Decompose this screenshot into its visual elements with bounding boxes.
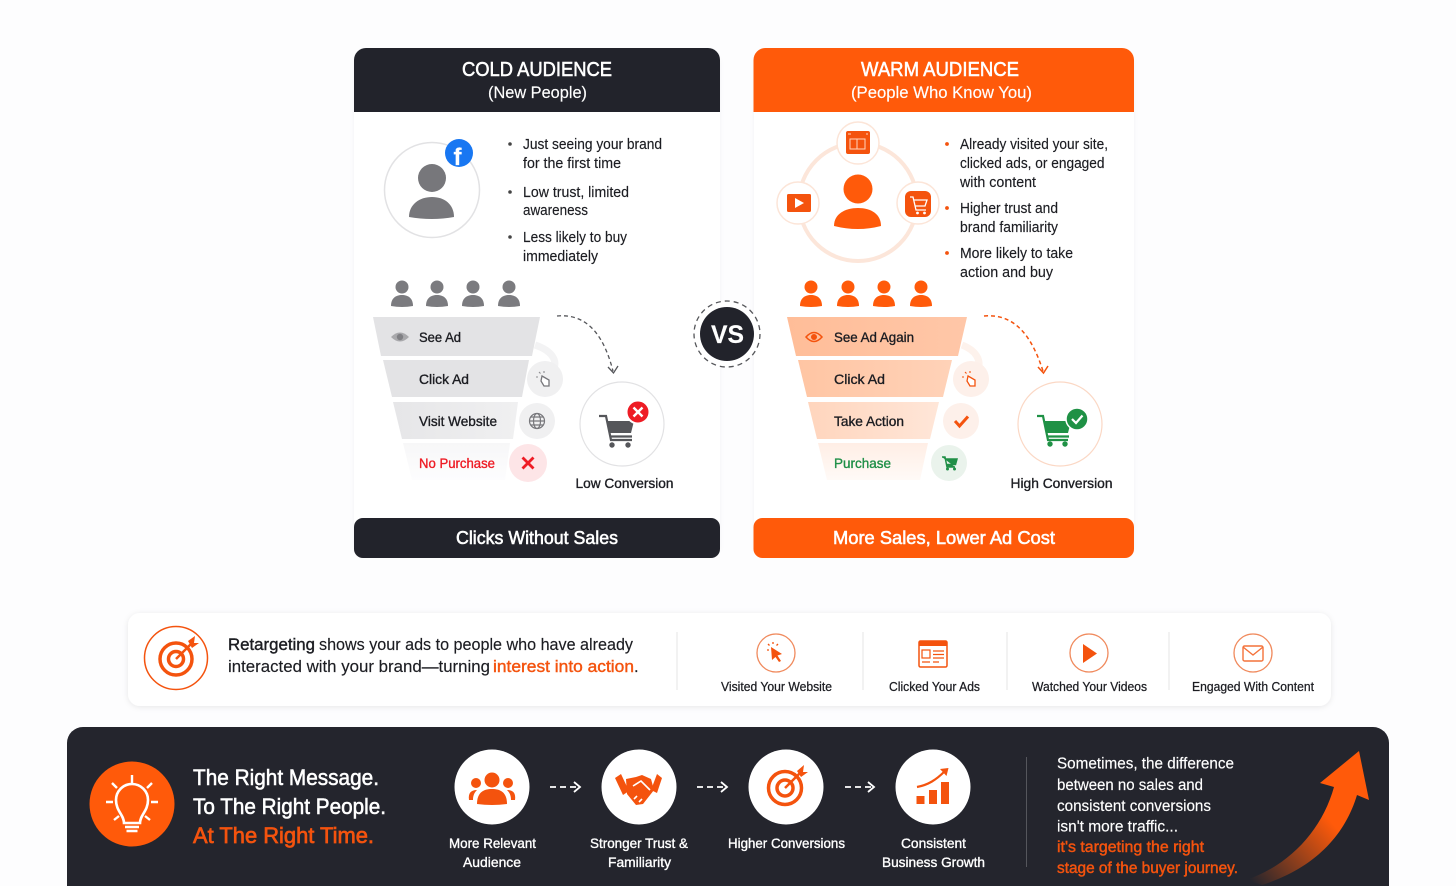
item: watched your videos [1032, 634, 1147, 694]
step: business growth: Business Growth [882, 854, 985, 870]
closing statement: Sometimes, the difference [1057, 756, 1234, 772]
cold bullet list: immediately [523, 249, 599, 265]
retargeting text [228, 636, 639, 676]
icon: red cross [509, 444, 547, 482]
closing statement [1057, 756, 1238, 877]
item: engaged with content [1192, 634, 1315, 694]
icon: known person with orbit [777, 122, 939, 261]
cold bullet list [508, 137, 662, 265]
item: clicked your ads: Clicked Your Ads [889, 680, 980, 694]
warm bullet list [945, 137, 1108, 281]
high conversion icon [1018, 382, 1102, 466]
funnel step labels [834, 329, 914, 471]
step: stronger trust [590, 750, 689, 870]
icon: browser node [837, 122, 879, 164]
high conversion label: High Conversion [1010, 475, 1112, 491]
warm bullet list: brand familiarity [960, 220, 1059, 236]
warm bullet list: More likely to take [960, 246, 1073, 262]
icon: new person with Facebook badge: f [454, 144, 462, 171]
warm bullet list: Higher trust and [960, 201, 1058, 217]
closing statement: stage of the buyer journey. [1057, 860, 1238, 877]
warm header [754, 48, 1134, 112]
arrow: to low conversion [557, 316, 618, 373]
closing statement: it's targeting the right [1057, 839, 1205, 856]
step: business growth [882, 750, 985, 870]
VS badge: VS [711, 321, 744, 349]
icon: video node [777, 182, 819, 224]
retargeting text: Retargeting [228, 636, 315, 654]
step: stronger trust: Stronger Trust & [590, 835, 689, 851]
cold bullet list: Less likely to buy [523, 230, 628, 246]
retargeting text: interest into action [493, 658, 634, 676]
funnel step labels: Visit Website [419, 413, 497, 429]
item: clicked your ads [889, 641, 980, 694]
icon: target [144, 626, 208, 690]
warm funnel [787, 317, 989, 481]
item: watched your videos: Watched Your Videos [1032, 680, 1147, 694]
funnel step labels: Purchase [834, 455, 891, 471]
arrow: step 1 to 2 [550, 782, 580, 792]
panel: retargeting definition [128, 613, 1331, 706]
closing statement: consistent conversions [1057, 798, 1211, 815]
icon: light bulb [90, 762, 174, 846]
step: stronger trust: Familiarity [608, 854, 671, 870]
panel: warm audience [754, 48, 1134, 558]
funnel step labels: See Ad [419, 329, 461, 345]
cold header [354, 48, 720, 112]
cold footer banner: Clicks Without Sales [456, 528, 618, 548]
step: business growth: Consistent [901, 835, 966, 851]
icon: eye [391, 332, 409, 342]
funnel step labels: Click Ad [419, 371, 469, 387]
warm footer banner [754, 518, 1134, 558]
step: higher conversions: Higher Conversions [728, 835, 845, 851]
warm bullet list: Already visited your site, [960, 137, 1108, 153]
funnel step labels: Take Action [834, 413, 904, 429]
icon: cart node [897, 182, 939, 224]
step: higher conversions [728, 750, 845, 851]
item: visited your website: Visited Your Website [721, 680, 832, 694]
low conversion icon [580, 382, 664, 466]
warm bullet list: action and buy [960, 265, 1054, 281]
step: more relevant audience: More Relevant [449, 835, 536, 851]
funnel step labels: No Purchase [419, 455, 495, 471]
item: visited your website [721, 634, 832, 694]
cold header: COLD AUDIENCE [462, 59, 612, 81]
warm bullet list: with content [959, 175, 1036, 191]
headline: right message [193, 765, 386, 848]
step: more relevant audience [449, 750, 536, 870]
retargeting text: . [634, 658, 639, 676]
cold bullet list: Just seeing your brand [523, 137, 662, 153]
arrow: step 2 to 3 [697, 782, 727, 792]
funnel step labels: See Ad Again [834, 329, 914, 345]
warm header: (People Who Know You) [851, 83, 1032, 102]
cold footer banner [354, 518, 720, 558]
cold funnel [373, 317, 563, 482]
arrow: growth [1246, 751, 1369, 885]
VS badge [694, 301, 760, 367]
step: more relevant audience: Audience [463, 854, 521, 870]
warm bullet list: clicked ads, or engaged [960, 156, 1104, 172]
low conversion label: Low Conversion [576, 475, 674, 491]
warm footer banner: More Sales, Lower Ad Cost [833, 528, 1055, 548]
retargeting text: interacted with your brand—turning [228, 658, 490, 676]
closing statement: between no sales and [1057, 777, 1203, 794]
panel: dark results bar [67, 727, 1389, 886]
icon: orange click hand [953, 361, 989, 397]
item: engaged with content: Engaged With Content [1192, 680, 1315, 694]
cold header: (New People) [488, 83, 587, 102]
icon: new person with Facebook badge [384, 139, 480, 238]
icon: orange eye [806, 332, 822, 342]
icon: row of orange people [800, 280, 932, 307]
arrow: step 3 to 4 [845, 782, 874, 792]
cold bullet list: awareness [523, 203, 588, 219]
warm header: WARM AUDIENCE [861, 59, 1019, 81]
icon: row of grey people [391, 280, 520, 307]
headline: right message: The Right Message. [193, 765, 379, 790]
arrow: to high conversion [984, 316, 1048, 373]
cold bullet list: Low trust, limited [523, 185, 629, 201]
icon: globe [519, 403, 555, 439]
headline: right message: To The Right People. [193, 794, 386, 819]
icon: click hand [527, 361, 563, 397]
headline: right message: At The Right Time. [193, 823, 374, 848]
cold bullet list: for the first time [523, 156, 621, 172]
funnel step labels [419, 329, 497, 471]
funnel step labels: Click Ad [834, 371, 885, 387]
retargeting text: shows your ads to people who have already [319, 636, 634, 654]
panel: cold audience [354, 48, 720, 558]
closing statement: isn't more traffic... [1057, 818, 1178, 836]
icon: orange check [943, 403, 979, 439]
icon: green cart [931, 445, 967, 481]
